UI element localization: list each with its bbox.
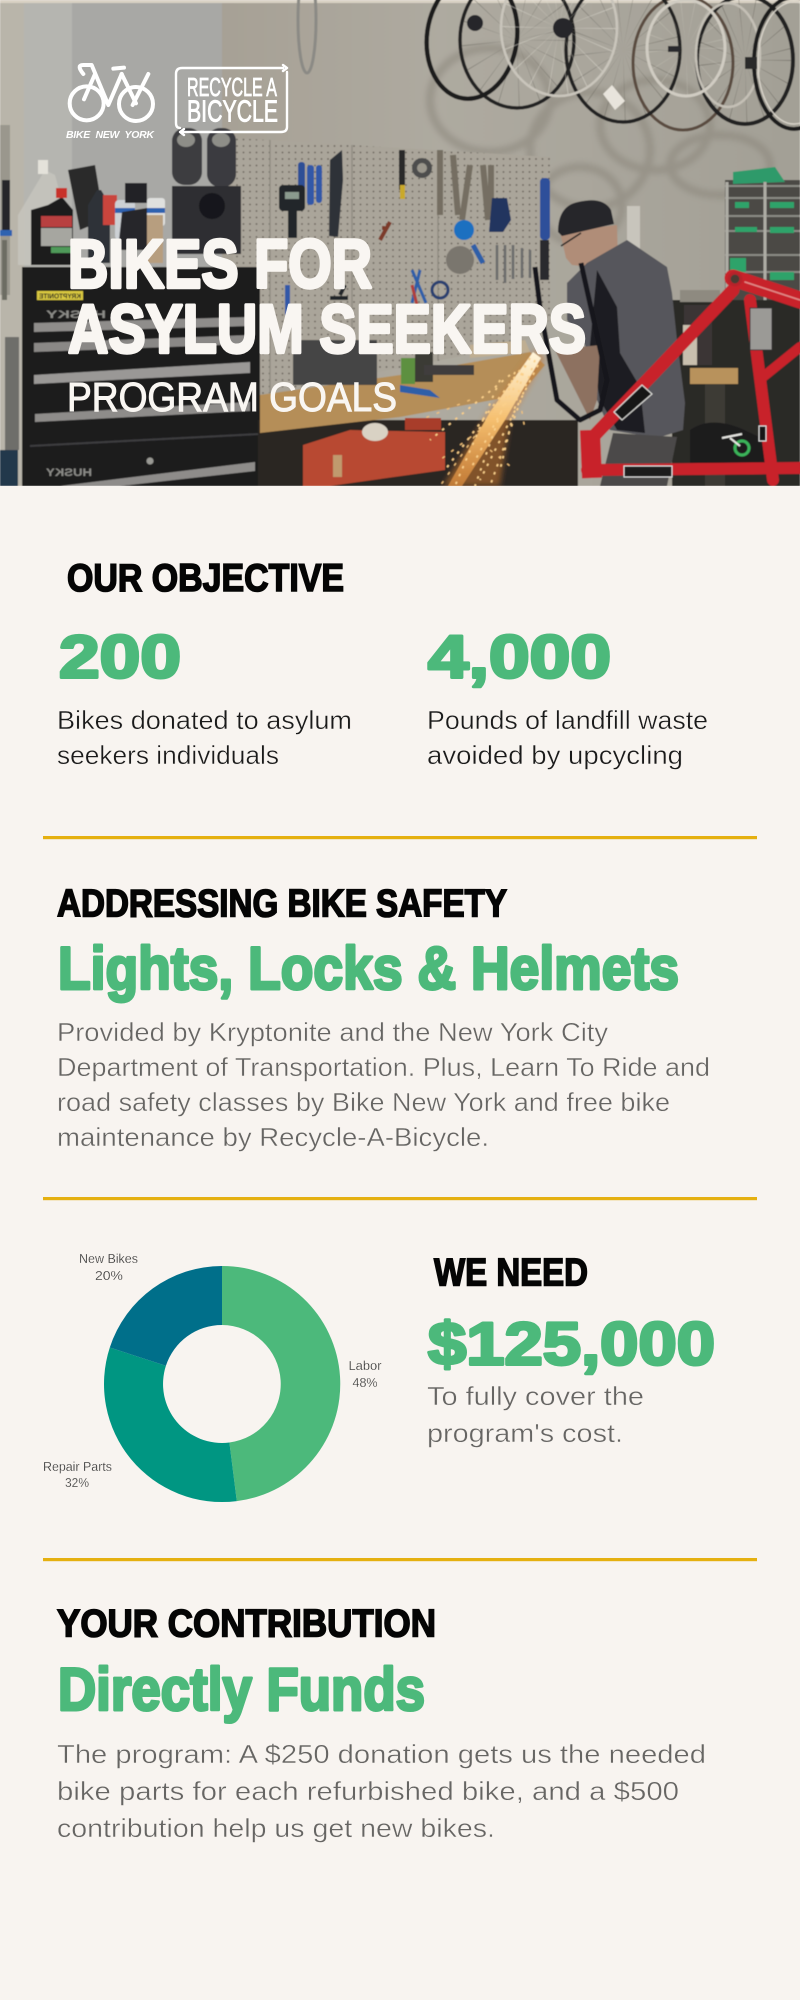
donut chart: program cost breakdown [43,1251,382,1502]
description [57,1739,706,1843]
label: New Bikes: New Bikes [79,1251,138,1266]
title: ASYLUM SEEKERS [68,290,586,368]
stat: 200 bikes: seekers individuals [57,740,279,770]
stat: 4,000 pounds: 4,000 [428,624,611,690]
stat: 4,000 pounds: avoided by upcycling [427,740,683,770]
segment: Repair Parts 32% [104,1348,237,1502]
label: Labor [348,1358,382,1390]
stat: 4,000 pounds: Pounds of landfill waste [427,705,708,735]
dark equipment behind frame [672,290,800,486]
description [427,1381,644,1448]
description: road safety classes by Bike New York and free bike [57,1087,670,1117]
description: The program: A $250 donation gets us the needed [57,1739,706,1769]
label: Repair Parts: 32% [65,1475,89,1490]
back wall [0,0,800,486]
label: Labor: 48% [352,1375,378,1390]
label: Repair Parts: Repair Parts [43,1459,112,1474]
workbench [258,340,579,486]
hanging wheels [298,0,800,130]
logo: Recycle A Bicycle: RECYCLE A [187,72,277,102]
heading: ADDRESSING BIKE SAFETY [57,882,507,926]
panel: our objective [57,557,708,770]
speakers [172,128,241,254]
description [57,1017,710,1152]
mechanic [555,200,685,486]
subtitle: PROGRAM GOALS [67,374,397,420]
stat: 4,000 pounds [427,624,708,770]
segment: New Bikes 20% [110,1266,222,1366]
wheel shadows on wall [430,48,770,243]
title: BIKES FOR [68,226,372,302]
stat: 200 bikes [57,624,352,770]
stat: 200 bikes: 200 [59,624,181,690]
description: bike parts for each refurbished bike, and a $500 [57,1776,679,1806]
title [68,226,586,368]
description: maintenance by Recycle-A-Bicycle. [57,1122,489,1152]
tool chest: HUSKY [45,467,92,479]
segment: Labor 48% [222,1266,340,1501]
panel: addressing bike safety [57,882,710,1152]
amount: $125,000 [428,1310,715,1378]
pegboard [233,138,550,400]
sparks from the grinder [420,350,545,486]
label: New Bikes: 20% [95,1268,123,1283]
logo: Recycle A Bicycle [176,65,287,135]
description: Department of Transportation. Plus, Learn To Ride and [57,1052,710,1082]
description: program's cost. [427,1418,623,1448]
tool chest: HUSKY [45,309,106,321]
label: Repair Parts [43,1459,112,1490]
panel: your contribution [57,1602,706,1843]
red toolbox [303,418,445,486]
description: contribution help us get new bikes. [57,1813,495,1843]
label: New Bikes [79,1251,138,1283]
bike frame held by mechanic [535,263,607,420]
red bike frame [587,273,800,480]
logo: Bike New York [66,65,155,141]
label: Labor: Labor [348,1358,382,1373]
tool chest: KRYPTONITE [39,294,81,300]
pegboard tools [279,150,550,315]
hero photo: bike workshop [0,0,800,486]
description: Provided by Kryptonite and the New York City [57,1017,608,1047]
logo: Bike New York: BIKE NEW YORK [66,129,155,141]
green headline: Lights, Locks & Helmets [58,935,679,1002]
parts shelves [725,167,800,300]
heading: YOUR CONTRIBUTION [57,1602,436,1646]
tool chest [0,267,260,486]
description: To fully cover the [427,1381,644,1411]
panel: we need [427,1252,715,1448]
heading: WE NEED [434,1252,588,1294]
green headline: Directly Funds [58,1656,425,1723]
heading: OUR OBJECTIVE [67,557,344,600]
stat: 200 bikes: Bikes donated to asylum [57,705,352,735]
left-hand wall tools and bottles [0,125,165,450]
wheel hubs and tag [467,15,757,110]
logo: Recycle A Bicycle: BICYCLE [187,94,278,128]
